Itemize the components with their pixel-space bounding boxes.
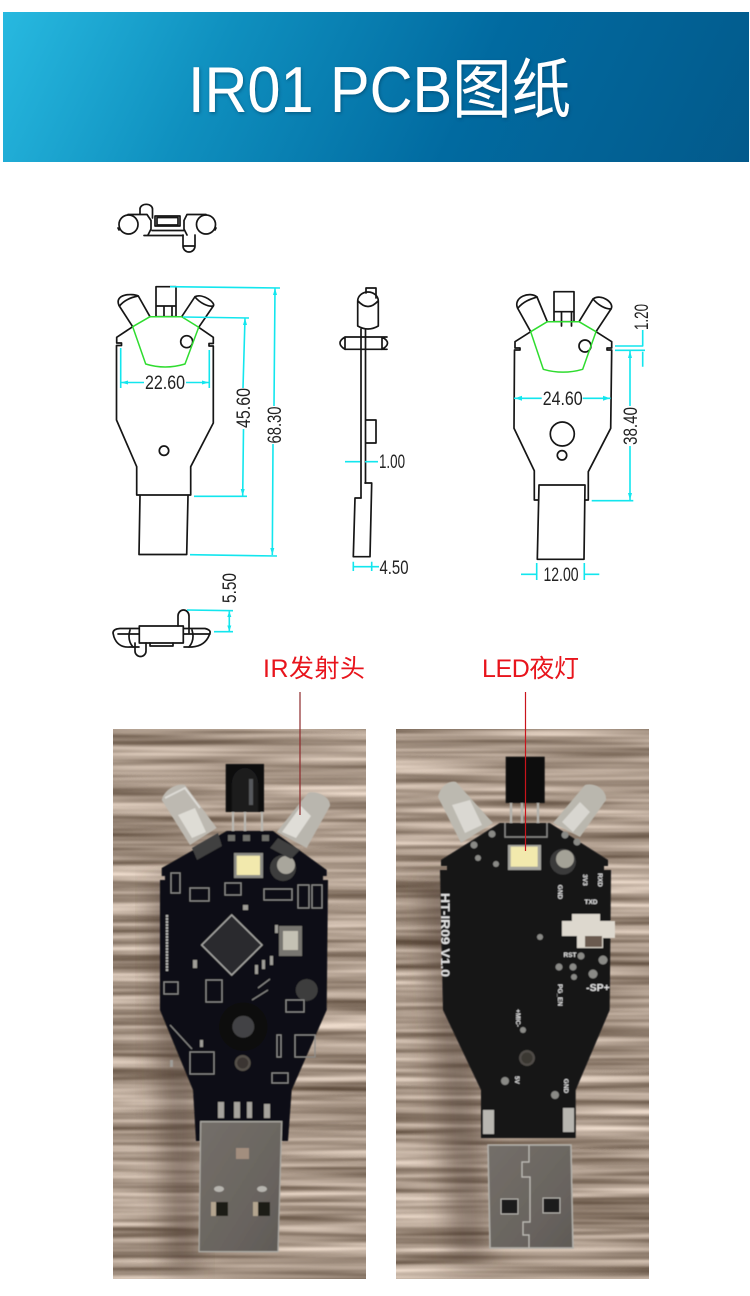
green keep-out outline <box>133 317 199 367</box>
photo: PCB back side <box>396 729 649 1279</box>
white LED <box>508 845 541 870</box>
drawing: side view <box>340 288 408 579</box>
mounting hole <box>235 1055 251 1071</box>
silkscreen: model: HT-IR09 V1.0 <box>438 893 450 977</box>
dimension 12.00 <box>521 563 599 586</box>
callout line: IR emitter <box>299 692 301 815</box>
green keep-out outline <box>531 322 596 372</box>
IR receiver <box>226 764 264 831</box>
dimension 38.40 <box>592 346 645 501</box>
dimension 4.50: 4.50 <box>380 558 408 579</box>
solder bracket <box>505 823 547 837</box>
dimension 4.50 <box>353 558 408 579</box>
drawing: top view <box>118 204 216 252</box>
dimension 5.50: 5.50 <box>220 573 241 603</box>
callout line: LED night light <box>524 692 526 851</box>
silkscreen: pin names: RST <box>564 952 577 959</box>
dimension 45.60 <box>183 317 255 496</box>
silkscreen: pin names <box>513 873 610 1094</box>
drawing: front view, right <box>514 292 653 586</box>
silkscreen: pin names: 5V <box>513 1076 520 1085</box>
dimension 24.60 <box>514 389 611 410</box>
dimension 22.60: 22.60 <box>145 373 185 394</box>
USB plug <box>488 1145 573 1248</box>
dimension 68.30: 68.30 <box>265 406 286 444</box>
board shadow <box>150 880 200 1270</box>
silkscreen: pin names: 3V3 <box>581 874 588 886</box>
dimension 68.30 <box>170 287 286 556</box>
dimension 24.60: 24.60 <box>543 389 583 410</box>
clear IR LED right <box>277 792 330 848</box>
silkscreen: pin names: TXD <box>584 899 598 906</box>
dimension 45.60: 45.60 <box>234 388 255 428</box>
USB solder tabs <box>483 1108 574 1134</box>
silkscreen: pin names: PG_EN <box>556 984 563 1006</box>
drawing: bottom view <box>113 573 241 656</box>
board mounting hole <box>519 1050 535 1066</box>
component glints <box>170 905 278 1067</box>
header pads <box>228 835 269 841</box>
photo: PCB front side <box>113 729 366 1279</box>
silkscreen: pin names: RXD <box>596 873 603 887</box>
clear IR LED left <box>162 785 217 845</box>
LED silkscreen right <box>270 838 300 859</box>
LED silkscreen left <box>192 833 222 860</box>
silkscreen: pin names: GND <box>556 885 563 900</box>
label: LED night light: LED夜灯 <box>482 655 579 683</box>
silkscreen: pin names: GND <box>562 1079 569 1094</box>
drawing: front view, left <box>116 287 286 556</box>
silkscreen part number <box>166 915 168 972</box>
dimension 1.20: 1.20 <box>632 304 653 330</box>
board <box>160 831 328 1141</box>
dimension 22.60 <box>121 348 209 394</box>
small clear LED <box>550 849 576 875</box>
clear IR LED right <box>553 784 606 837</box>
IR receiver rear <box>506 757 545 823</box>
silkscreen: pin names: +MIC- <box>514 1009 521 1027</box>
wood background <box>113 729 366 1279</box>
white connector <box>562 914 615 948</box>
dimension 38.40: 38.40 <box>621 407 642 445</box>
MCU chip <box>201 914 263 976</box>
dimension 1.00: 1.00 <box>379 452 405 473</box>
microphone <box>219 1003 267 1051</box>
title: IR01 PCB图纸 <box>188 53 571 126</box>
silkscreen: pin names: -SP+ <box>586 982 610 994</box>
USB plug <box>199 1122 282 1252</box>
title banner <box>3 12 749 162</box>
silkscreen component outlines <box>164 873 322 1083</box>
dimension 12.00: 12.00 <box>544 565 578 586</box>
white LED <box>234 853 263 878</box>
board shadow <box>420 880 490 1260</box>
small clear LED <box>270 855 296 881</box>
wood background <box>396 729 649 1279</box>
USB solder pins <box>218 1102 270 1118</box>
crystal <box>279 926 302 956</box>
board <box>440 823 611 1138</box>
label: IR emitter: IR发射头 <box>263 655 365 683</box>
dimension 1.20 <box>632 304 653 367</box>
test pads <box>470 830 608 1099</box>
inductor <box>296 979 318 1001</box>
clear IR LED left <box>438 782 493 843</box>
dimension 1.00 <box>345 452 405 473</box>
